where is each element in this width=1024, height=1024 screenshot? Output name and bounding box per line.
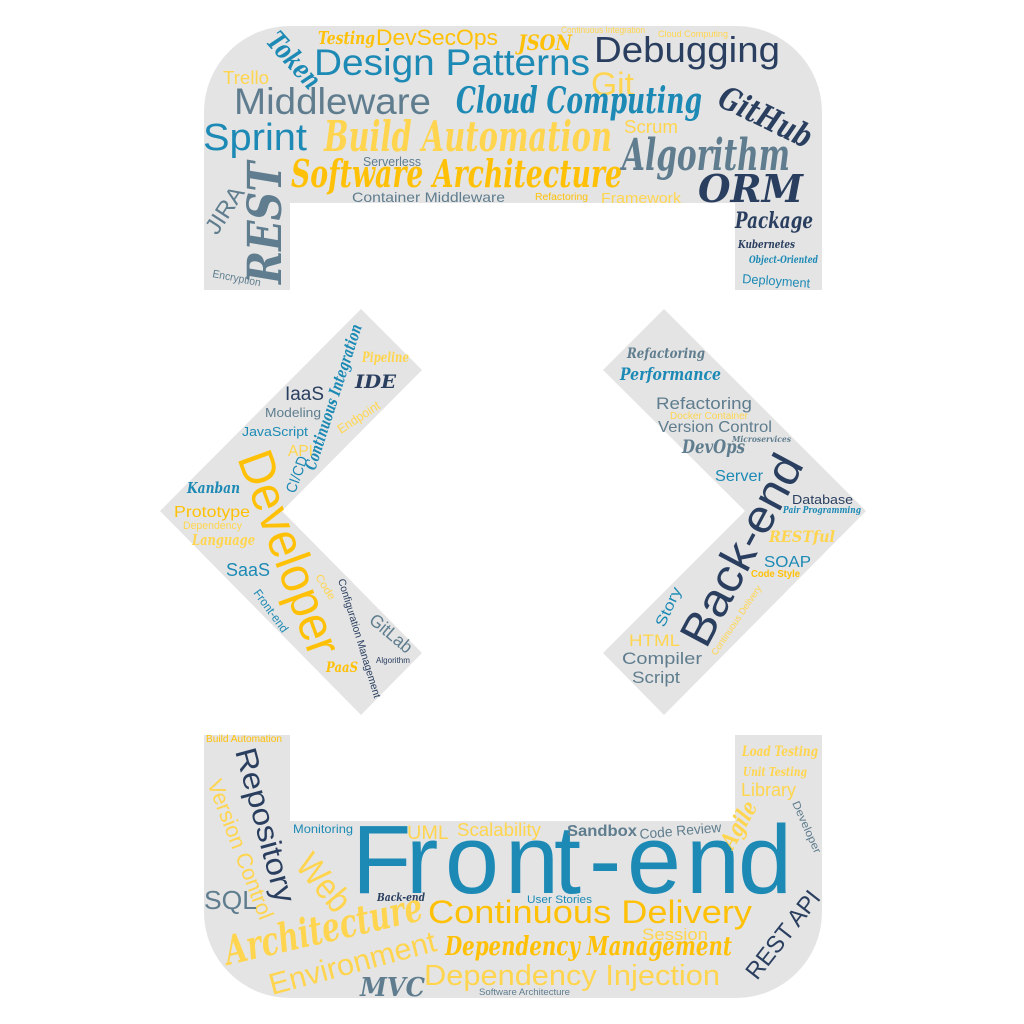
- word: Code Review: Code Review: [639, 819, 723, 842]
- word: Developer: Developer: [227, 443, 352, 663]
- word: SaaS: SaaS: [226, 560, 270, 580]
- word: Endpoint: Endpoint: [334, 398, 383, 437]
- word: Design Patterns: Design Patterns: [314, 42, 590, 83]
- word: DevSecOps: DevSecOps: [376, 25, 498, 50]
- word: Package: Package: [734, 208, 813, 234]
- top bracket shape: [204, 26, 822, 290]
- word: Language: Language: [191, 531, 255, 549]
- word: IDE: IDE: [354, 371, 397, 393]
- word: JIRA: JIRA: [199, 180, 250, 239]
- word: Token: Token: [260, 26, 327, 96]
- word: Debugging: Debugging: [594, 29, 780, 70]
- word: SOAP: SOAP: [764, 554, 811, 571]
- panel: top bracket: [199, 25, 822, 291]
- word: Load Testing: Load Testing: [741, 744, 818, 760]
- word: Performance: Performance: [619, 365, 721, 385]
- word: Pair Programming: Pair Programming: [782, 505, 861, 516]
- word: Container Middleware: Container Middleware: [352, 189, 505, 205]
- word: DevOps: DevOps: [681, 436, 745, 458]
- word: Back-end script: Back-end: [376, 891, 425, 904]
- word: Library: Library: [741, 780, 796, 800]
- word: Pipeline: Pipeline: [361, 350, 409, 366]
- bottom bracket shape: [204, 735, 822, 998]
- word: IaaS: IaaS: [285, 384, 324, 405]
- word: Prototype: Prototype: [174, 504, 250, 521]
- word: Version Control: Version Control: [658, 419, 772, 436]
- word: Software Architecture small: Software Architecture: [479, 987, 570, 998]
- word: Refactoring script: Refactoring: [626, 346, 705, 362]
- word: Framework: Framework: [601, 190, 682, 207]
- left chevron shape: [160, 309, 422, 715]
- word: Code: Code: [312, 572, 337, 602]
- word: Dependency Management: Dependency Management: [444, 932, 732, 962]
- panel: right chevron: [603, 309, 866, 715]
- word: Scalability: Scalability: [457, 820, 541, 840]
- word: Script: Script: [632, 668, 680, 687]
- word: Continuous Integration: Continuous Integration: [561, 25, 645, 35]
- word: Deployment: Deployment: [742, 271, 811, 291]
- word: Front-end: Front-end: [352, 805, 792, 914]
- word: Web: Web: [288, 845, 360, 920]
- word: HTML: HTML: [629, 631, 680, 650]
- word: Continuous Integration script: Continuous Integration: [301, 322, 366, 472]
- word: Testing: Testing: [318, 28, 375, 49]
- word: JSON: JSON: [515, 30, 573, 55]
- word: Git: Git: [591, 66, 634, 102]
- word: GitLab: GitLab: [365, 610, 417, 657]
- word: Agile: Agile: [714, 796, 763, 854]
- word: MVC: MVC: [359, 973, 425, 1003]
- word: Monitoring: Monitoring: [293, 822, 353, 836]
- word: Cloud Computing script: Cloud Computing: [456, 80, 702, 122]
- panel: bottom bracket: [202, 734, 826, 1003]
- word: Object-Oriented: Object-Oriented: [749, 254, 818, 266]
- word: Sandbox: Sandbox: [567, 823, 637, 840]
- word: Story: Story: [652, 584, 686, 630]
- word: Encryption: Encryption: [211, 268, 262, 289]
- word: Unit Testing: Unit Testing: [743, 765, 807, 779]
- word: Database: Database: [792, 492, 853, 507]
- word: Build Automation small: Build Automation: [206, 734, 282, 745]
- word: Continuous Delivery: Continuous Delivery: [428, 894, 752, 930]
- word: Front-end: Front-end: [251, 587, 291, 635]
- word: PaaS: PaaS: [325, 660, 358, 676]
- word: Configuration Management: Configuration Management: [335, 577, 383, 700]
- word: Code Style: Code Style: [751, 569, 800, 580]
- word: Build Automation: Build Automation: [323, 112, 612, 161]
- word: Docker Container: Docker Container: [670, 411, 749, 422]
- word: Cloud Computing small: Cloud Computing: [658, 29, 728, 39]
- word: ORM: ORM: [698, 166, 804, 211]
- word: Repository: Repository: [228, 744, 301, 906]
- word: Back-end: Back-end: [669, 445, 813, 655]
- word: Refactoring: Refactoring: [535, 192, 588, 203]
- word: Modeling: Modeling: [265, 405, 321, 420]
- word: Architecture: Architecture: [217, 884, 427, 975]
- word: REST API: REST API: [740, 885, 826, 985]
- word: JavaScript: JavaScript: [242, 424, 308, 439]
- word: Compiler: Compiler: [622, 649, 702, 668]
- word: Serverless: Serverless: [363, 155, 421, 169]
- word: Kanban: Kanban: [186, 479, 240, 497]
- word: Developer small: Developer: [789, 799, 823, 856]
- word: Dependency: Dependency: [183, 520, 242, 532]
- word: Environment: Environment: [265, 925, 441, 1002]
- word: Refactoring: Refactoring: [656, 394, 752, 413]
- word: Software Architecture: Software Architecture: [291, 151, 622, 196]
- word: API: API: [288, 443, 313, 460]
- panel: left chevron: [160, 309, 422, 715]
- word: Trello: Trello: [223, 68, 269, 88]
- word: GitHub: GitHub: [712, 78, 819, 156]
- word: UML: UML: [407, 823, 449, 844]
- word: REST: REST: [238, 159, 293, 286]
- word: SQL: SQL: [204, 885, 257, 915]
- word: Server: Server: [715, 468, 764, 485]
- word: Scrum: Scrum: [624, 117, 678, 137]
- word: Session: Session: [642, 925, 708, 944]
- word: Algorithm small: Algorithm: [376, 656, 410, 665]
- word: Middleware: Middleware: [234, 81, 431, 122]
- word: Continuous Delivery: Continuous Delivery: [709, 583, 764, 658]
- word: CI/CD: CI/CD: [283, 454, 312, 495]
- word: Kubernetes: Kubernetes: [737, 237, 795, 251]
- word: Sprint: Sprint: [203, 117, 307, 159]
- word: RESTful: RESTful: [768, 527, 835, 546]
- word: Microservices: Microservices: [731, 435, 791, 445]
- word: User Stories: User Stories: [527, 894, 593, 906]
- word: Dependency Injection: Dependency Injection: [424, 960, 720, 992]
- word: Version Control: Version Control: [202, 776, 279, 923]
- word: Algorithm: Algorithm: [619, 130, 790, 181]
- right chevron shape: [603, 309, 866, 715]
